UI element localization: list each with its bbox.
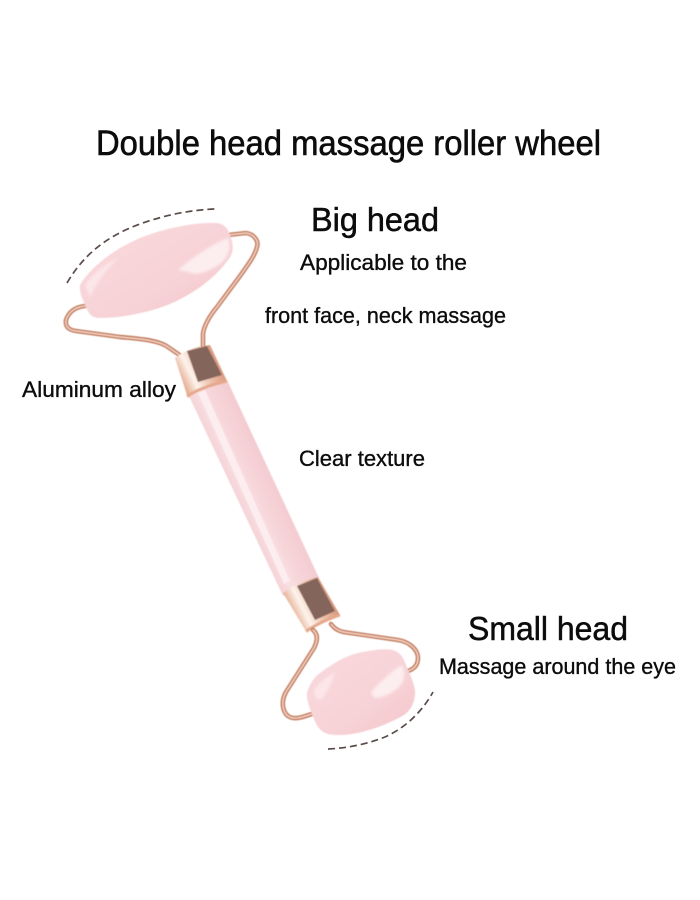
big head description: front face, neck massage	[265, 303, 506, 328]
dashed arc: big head	[67, 209, 215, 283]
wire frame: top	[66, 233, 257, 356]
upper collar	[175, 345, 227, 398]
lower collar	[283, 577, 340, 633]
dashed arc: small head	[328, 692, 433, 749]
big head description	[265, 250, 506, 328]
big roller highlights	[178, 238, 230, 274]
title: Double head massage roller wheel	[96, 124, 601, 163]
small head description: Massage around the eye	[439, 654, 676, 679]
small head heading: Small head	[468, 610, 628, 647]
material label: Aluminum alloy	[22, 377, 176, 402]
big roller head	[80, 223, 233, 318]
jade roller product	[66, 223, 418, 735]
small roller highlights	[371, 665, 404, 698]
big head description: Applicable to the	[300, 250, 467, 275]
handle	[189, 380, 319, 596]
handle label: Clear texture	[299, 446, 425, 471]
big head heading: Big head	[311, 201, 439, 238]
small roller head	[307, 649, 415, 735]
handle highlight	[198, 390, 290, 584]
wire frame: bottom	[283, 624, 418, 718]
